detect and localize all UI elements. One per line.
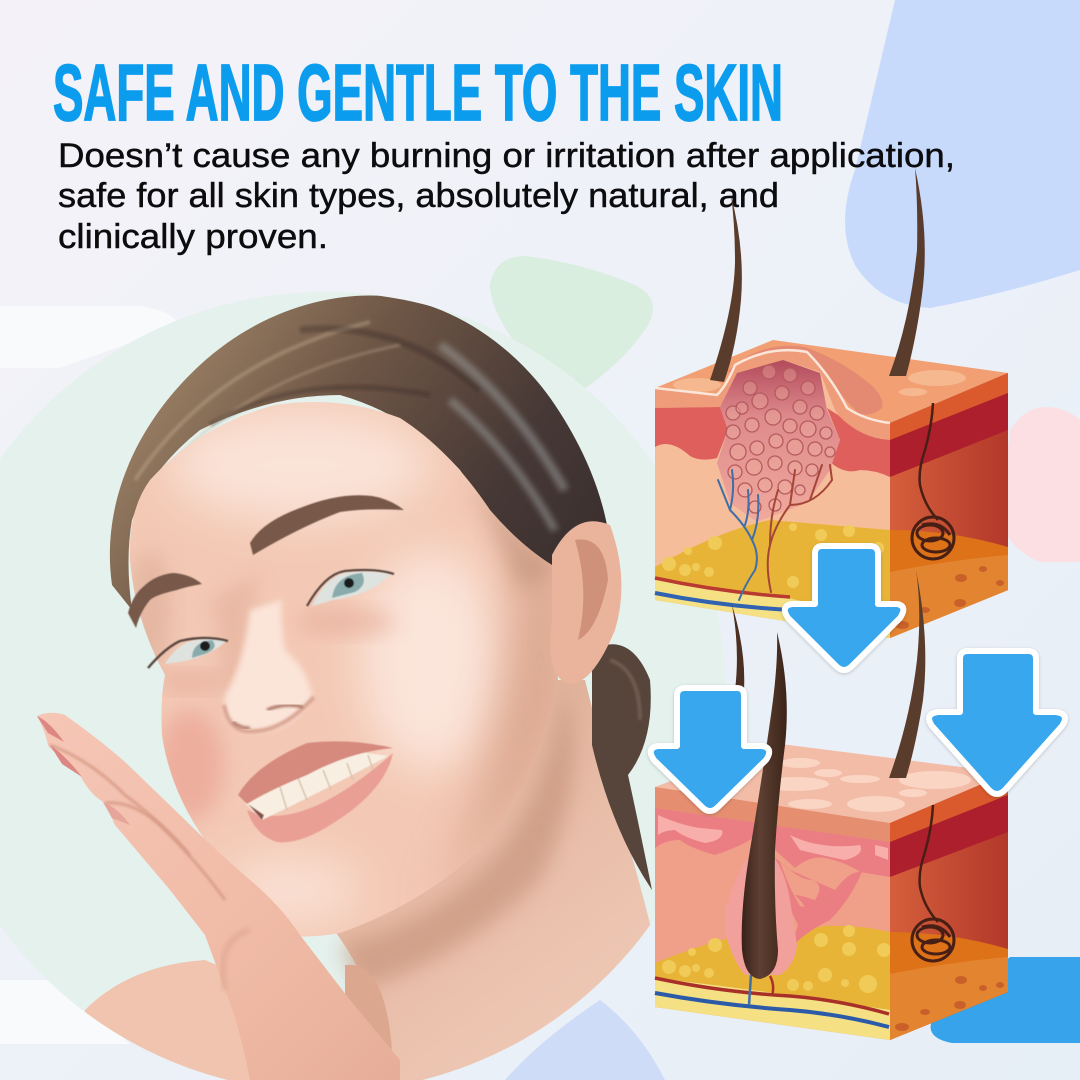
description text: clinically proven. bbox=[58, 218, 328, 256]
face bbox=[130, 402, 558, 936]
fat layer bbox=[655, 520, 890, 638]
skin block: before (inflamed pimple) bbox=[655, 168, 1008, 638]
pale green circle behind the model bbox=[0, 292, 725, 1080]
arrow: right bbox=[929, 651, 1065, 794]
main hair bbox=[110, 296, 607, 608]
right eye bbox=[307, 570, 394, 606]
ear bbox=[550, 521, 621, 684]
shoulder bbox=[84, 960, 250, 1080]
arrow: top centre bbox=[785, 546, 903, 670]
front face, lower dermis bbox=[655, 350, 890, 638]
blood vessel roots bbox=[749, 975, 751, 1005]
hair strand, back right bbox=[889, 570, 925, 778]
neck shadow under the jaw bbox=[340, 690, 573, 990]
blood vessels bbox=[718, 465, 832, 600]
description text bbox=[58, 137, 955, 256]
neck bbox=[330, 680, 655, 1080]
model portrait bbox=[37, 295, 655, 1080]
fat layer bbox=[655, 926, 890, 1040]
pimple cell cluster bbox=[717, 360, 840, 522]
fat dots bbox=[662, 523, 884, 588]
arrow: bottom left bbox=[651, 688, 769, 811]
top surface bbox=[655, 340, 1008, 423]
hair strands bbox=[710, 195, 742, 382]
top surface bbox=[655, 743, 1008, 823]
tissue bands bbox=[655, 978, 890, 1040]
eyebrows bbox=[250, 495, 404, 555]
nose bbox=[224, 600, 314, 731]
sebaceous gland bbox=[775, 858, 862, 950]
sweat gland bbox=[912, 403, 954, 559]
description text: safe for all skin types, absolutely natural, and bbox=[58, 177, 779, 215]
hair strands and shine bbox=[135, 322, 565, 530]
skin block: after (healthy follicle) bbox=[655, 570, 1008, 1040]
hand bbox=[37, 713, 400, 1080]
hair follicle sac bbox=[725, 855, 797, 975]
left eye bbox=[148, 638, 228, 668]
face shading bbox=[128, 410, 570, 925]
description text: Doesn’t cause any burning or irritation after application, bbox=[58, 137, 955, 175]
red dermis bbox=[655, 407, 728, 460]
right side face bbox=[890, 773, 1008, 1040]
raised lump, back bbox=[727, 346, 882, 415]
epidermis band bbox=[655, 787, 890, 842]
front face, dermis bbox=[655, 787, 890, 1040]
sweat gland bbox=[912, 805, 954, 961]
lips and smile bbox=[238, 741, 393, 842]
tissue bands bbox=[655, 578, 890, 638]
hair shaft and bulb bbox=[742, 632, 787, 979]
epidermis bbox=[655, 350, 890, 440]
pink wave layer bbox=[655, 808, 890, 877]
fat dots bbox=[662, 925, 891, 993]
right side face bbox=[890, 373, 1008, 638]
back hair and bun bbox=[592, 644, 652, 890]
